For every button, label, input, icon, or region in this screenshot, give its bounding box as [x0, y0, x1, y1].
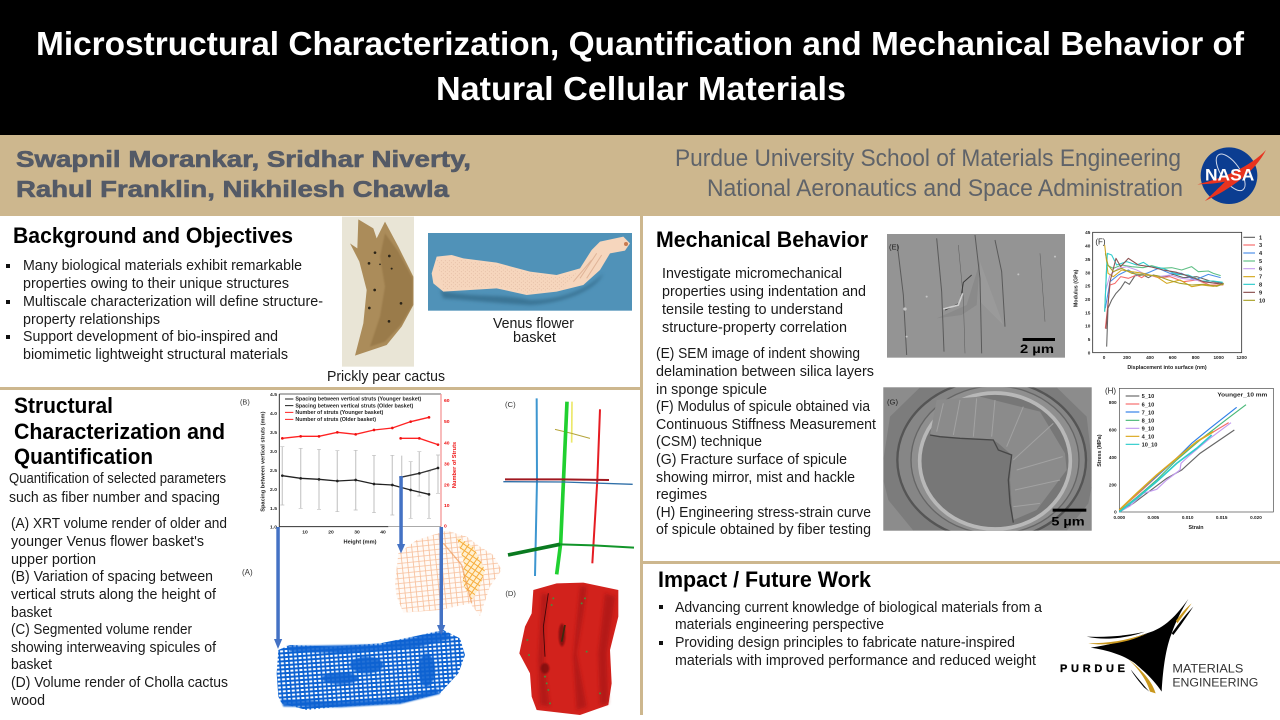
bullet list: impact: materials engineering perspective	[675, 617, 884, 633]
chart H: stress-strain curves: 4_10	[1142, 435, 1154, 441]
axis ticks and labels: 200	[1109, 482, 1117, 487]
panel: mechanical behavior	[656, 227, 1273, 540]
figure A label: (A)	[242, 568, 253, 577]
bullet list: impact	[659, 600, 1043, 669]
affiliations: National Aeronautics and Space Administration	[707, 175, 1183, 202]
author and affiliation band	[0, 135, 1280, 216]
text: investigation summary: tensile testing to understand	[662, 302, 843, 318]
icon: Purdue Materials Engineering logo: PURDUE	[1060, 663, 1125, 675]
figure E: SEM image of indent: 2 µm	[1020, 342, 1054, 356]
figure D: Cholla cactus wood render: (D)	[505, 589, 516, 598]
chart B: strut spacing and number: 10	[444, 503, 450, 509]
chart B: strut spacing and number: Height (mm)	[343, 540, 377, 546]
chart H: stress-strain curves	[1097, 386, 1273, 531]
chart F: modulus vs displacement: 9	[1259, 290, 1262, 296]
title banner	[0, 0, 1280, 135]
figure A: younger basket render (orange)	[395, 531, 502, 616]
text: quantification summary: such as fiber number and spacing	[9, 490, 220, 506]
axis labels: 4.5	[270, 392, 277, 398]
chart F: modulus vs displacement: 1200	[1236, 355, 1247, 360]
text: figure descriptions A to D: showing interweaving spicules of	[11, 640, 217, 656]
heading: structural characterization and quantification	[14, 393, 225, 469]
text: figure descriptions A to D: basket	[11, 657, 52, 673]
affiliations	[675, 145, 1183, 202]
legend	[1243, 237, 1255, 300]
chart H: stress-strain curves: 0.000	[1114, 515, 1126, 520]
authors: Rahul Franklin, Nikhilesh Chawla	[16, 176, 449, 202]
figure G: SEM fracture surface: 5 µm	[1051, 515, 1085, 529]
legend: Spacing between vertical struts (Older basket)	[295, 403, 414, 409]
panel: background and objectives	[6, 217, 632, 385]
icon: NASA logo: NASA	[1205, 166, 1254, 185]
chart F: modulus vs displacement: 5	[1259, 259, 1262, 265]
chart H: stress-strain curves: 0.015	[1216, 515, 1228, 520]
chart B: strut spacing and number: 40	[380, 530, 386, 536]
series: spacing	[282, 476, 429, 494]
axis ticks and labels: 0	[1114, 510, 1117, 515]
chart H: stress-strain curves: Younger_10 mm	[1217, 392, 1267, 398]
chart H: stress-strain curves: (H)	[1105, 386, 1116, 395]
axis labels	[270, 392, 277, 530]
axes	[279, 393, 441, 395]
heading: mechanical behavior: Mechanical Behavior	[656, 227, 868, 252]
chart B: strut spacing and number: 20	[328, 530, 334, 536]
axis ticks and labels: 40	[1085, 244, 1091, 249]
caption: Venus flower basket: basket	[513, 330, 556, 346]
title banner: Natural Cellular Materials	[436, 71, 846, 108]
legend: Spacing between vertical struts (Younger basket)	[295, 397, 422, 403]
figure E: SEM image of indent: (E)	[889, 242, 900, 251]
axis labels: 2.0	[270, 487, 277, 493]
panel: structural characterization	[9, 392, 634, 715]
chart B: strut spacing and number: (B)	[240, 398, 250, 407]
icon: NASA logo	[1197, 147, 1266, 204]
axis labels: 1.5	[270, 506, 277, 512]
series: strut count	[282, 417, 429, 438]
figure G: SEM fracture surface: (G)	[887, 397, 899, 406]
chart H: stress-strain curves: Stress (MPa)	[1097, 434, 1103, 467]
text: quantification summary: Quantification of selected parameters	[9, 471, 226, 487]
caption: Prickly pear cactus: Prickly pear cactus	[327, 369, 445, 385]
text: figure descriptions E to H: showing mirror, mist and hackle	[656, 470, 855, 486]
text: investigation summary	[662, 266, 866, 336]
bullet list: objectives: Many biological materials exhibit remarkable	[23, 258, 302, 274]
heading: impact / future work: Impact / Future Work	[658, 567, 872, 592]
text: figure descriptions E to H: Continuous Stiffness Measurement	[656, 417, 876, 433]
axis ticks and labels: 600	[1109, 428, 1117, 433]
text: figure descriptions E to H: (H) Engineering stress-strain curve	[656, 505, 871, 521]
chart H: stress-strain curves: 10_10	[1142, 443, 1157, 449]
chart F: modulus vs displacement: 8	[1259, 282, 1262, 288]
figure C: segmented spicules: (C)	[505, 400, 516, 409]
chart F: modulus vs displacement: Displacement into surface (nm)	[1127, 365, 1207, 371]
text: figure descriptions E to H: (CSM) technique	[656, 434, 762, 450]
heading: structural characterization and quantification: Characterization and	[14, 419, 225, 444]
axis ticks and labels	[1085, 230, 1091, 355]
axis ticks and labels: 20	[1085, 297, 1091, 302]
axis ticks and labels: 25	[1085, 284, 1091, 289]
text: figure descriptions E to H: (F) Modulus of spicule obtained via	[656, 399, 871, 415]
legend	[285, 397, 422, 423]
text: figure descriptions E to H: in sponge spicule	[656, 382, 767, 398]
chart F: modulus vs displacement: 10	[1259, 298, 1265, 304]
chart B: strut spacing and number: 60	[444, 398, 450, 404]
chart F: modulus vs displacement: Modulus (GPa)	[1073, 269, 1079, 307]
chart B: strut spacing and number: Number of Struts	[452, 442, 458, 488]
curves	[1105, 245, 1224, 347]
axis ticks and labels	[1109, 400, 1117, 515]
text: figure descriptions A to D: (B) Variation of spacing between	[11, 569, 213, 585]
photo: prickly pear cactus	[342, 217, 414, 367]
text: figure descriptions E to H: regimes	[656, 487, 707, 503]
chart F: modulus vs displacement: 800	[1192, 355, 1200, 360]
text: figure descriptions E to H: (G) Fracture surface of spicule	[656, 452, 847, 468]
chart H: stress-strain curves: 0.020	[1250, 515, 1262, 520]
chart H: stress-strain curves: 0.005	[1148, 515, 1160, 520]
chart B: strut spacing and number: 50	[444, 419, 450, 425]
chart B: strut spacing and number: 30	[354, 530, 360, 536]
caption: Venus flower basket	[493, 316, 574, 346]
text: figure descriptions A to D: (A) XRT volume render of older and	[11, 516, 227, 532]
heading: structural characterization and quantification: Structural	[14, 393, 113, 418]
legend: Number of struts (Older basket)	[295, 417, 376, 423]
chart F: modulus vs displacement: 1	[1259, 235, 1262, 241]
chart B: strut spacing and number	[240, 392, 458, 546]
text: figure descriptions A to D: (D) Volume render of Cholla cactus	[11, 675, 228, 691]
chart F: modulus vs displacement: 0	[1103, 355, 1106, 360]
axis ticks and labels: 5	[1088, 337, 1091, 342]
axis labels: 3.0	[270, 449, 277, 455]
bullet list: impact: Advancing current knowledge of biological materials from a	[675, 600, 1043, 616]
chart F: modulus vs displacement: 6	[1259, 267, 1262, 273]
panel: impact and future work	[658, 567, 1258, 693]
text: figure descriptions A to D: wood	[10, 693, 45, 709]
axis ticks and labels: 0	[1088, 350, 1091, 355]
axis labels: 1.0	[270, 524, 277, 530]
figure C: segmented spicules	[503, 398, 634, 576]
axis ticks and labels: 10	[1085, 324, 1091, 329]
dividers	[0, 216, 1280, 715]
chart H: stress-strain curves: 7_10	[1142, 410, 1154, 416]
text: figure descriptions A to D: upper portion	[11, 552, 96, 568]
legend: Number of struts (Younger basket)	[295, 410, 384, 416]
figure E: SEM image of indent	[887, 234, 1065, 358]
chart F: modulus vs displacement	[1073, 230, 1265, 371]
heading: structural characterization and quantification: Quantification	[14, 444, 153, 469]
axis ticks and labels: 45	[1085, 230, 1091, 235]
chart B: strut spacing and number: 20	[444, 482, 450, 488]
bullet list: objectives: Support development of bio-inspired and	[23, 329, 278, 345]
bullet list: objectives: property relationships	[23, 312, 160, 328]
chart F: modulus vs displacement: 400	[1146, 355, 1154, 360]
text: figure descriptions A to D: younger Venus flower basket's	[11, 534, 204, 550]
chart F: modulus vs displacement: 200	[1123, 355, 1131, 360]
chart F: modulus vs displacement: 3	[1259, 243, 1262, 249]
axis ticks and labels: 35	[1085, 257, 1091, 262]
text: figure descriptions E to H	[656, 346, 876, 538]
chart F: modulus vs displacement: 7	[1259, 275, 1262, 281]
figure D: Cholla cactus wood render	[505, 583, 618, 715]
axis ticks and labels: 30	[1085, 270, 1091, 275]
text: figure descriptions A to D: (C) Segmented volume render	[11, 622, 192, 638]
chart H: stress-strain curves: Strain	[1188, 525, 1204, 531]
error bars	[282, 447, 438, 518]
text: investigation summary: Investigate micromechanical	[662, 266, 842, 282]
text: figure descriptions E to H: of spicule obtained by fiber testing	[656, 522, 871, 538]
icon: Purdue Materials Engineering logo: ENGINEERING	[1172, 676, 1258, 690]
authors	[16, 146, 471, 202]
chart H: stress-strain curves: 6_10	[1142, 402, 1154, 408]
axis labels: 2.5	[270, 468, 277, 474]
chart H: stress-strain curves: 0.010	[1182, 515, 1194, 520]
text: figure descriptions A to D: basket	[11, 605, 52, 621]
text: figure descriptions A to D	[10, 516, 228, 709]
authors: Swapnil Morankar, Sridhar Niverty,	[16, 146, 471, 172]
chart B: strut spacing and number: 0	[444, 524, 447, 530]
text: figure descriptions A to D: vertical struts along the height of	[11, 587, 217, 603]
caption: Venus flower basket: Venus flower	[493, 316, 574, 332]
text: quantification summary	[9, 471, 226, 506]
bullet list: objectives: Multiscale characterization will define structure-	[23, 294, 323, 310]
axis ticks and labels: 400	[1109, 455, 1117, 460]
arrows: blue pointers to renders	[274, 476, 445, 649]
chart F: modulus vs displacement: 1000	[1213, 355, 1224, 360]
chart B: strut spacing and number: Spacing between vertical struts (mm)	[260, 411, 266, 512]
title: Microstructural Characterization, Quantification and Mechanical Behavior of	[36, 26, 1245, 63]
axis ticks and labels: 15	[1085, 310, 1091, 315]
chart H: stress-strain curves: 9_10	[1142, 426, 1154, 432]
icon: Purdue Materials Engineering logo	[1060, 599, 1258, 693]
photo: Venus flower basket	[428, 233, 632, 311]
chart B: strut spacing and number: 10	[302, 530, 308, 536]
chart F: modulus vs displacement: 4	[1259, 251, 1263, 257]
chart B: strut spacing and number: 30	[444, 461, 450, 467]
heading: background and objectives: Background and Objectives	[13, 223, 293, 248]
figure G: SEM fracture surface	[883, 380, 1092, 540]
chart F: modulus vs displacement: 600	[1169, 355, 1177, 360]
text: investigation summary: structure-property correlation	[662, 320, 847, 336]
axis ticks and labels: 800	[1109, 400, 1117, 405]
chart F: modulus vs displacement: (F)	[1095, 237, 1106, 246]
figure A: older basket render (blue)	[277, 630, 465, 710]
legend	[1126, 396, 1139, 444]
bullet list: objectives: biomimetic lightweight structural materials	[23, 347, 288, 363]
text: figure descriptions E to H: delamination between silica layers	[656, 364, 874, 380]
chart H: stress-strain curves: 5_10	[1142, 394, 1154, 400]
axis labels: 3.5	[270, 430, 277, 436]
affiliations: Purdue University School of Materials Engineering	[675, 145, 1181, 172]
axis labels: 4.0	[270, 411, 277, 417]
bullet list: objectives	[6, 258, 323, 363]
text: figure descriptions E to H: (E) SEM image of indent showing	[656, 346, 860, 362]
text: investigation summary: properties using indentation and	[662, 284, 866, 300]
chart H: stress-strain curves: 8_10	[1142, 418, 1154, 424]
bullet list: impact: Providing design principles to fabricate nature-inspired	[675, 635, 1015, 651]
bullet list: impact: materials with improved performance and reduced weight	[675, 653, 1036, 669]
curves	[1119, 405, 1246, 512]
bullet list: objectives: properties owing to their unique structures	[23, 276, 289, 292]
icon: Purdue Materials Engineering logo: MATERIALS	[1172, 661, 1243, 675]
chart B: strut spacing and number: 40	[444, 440, 450, 446]
